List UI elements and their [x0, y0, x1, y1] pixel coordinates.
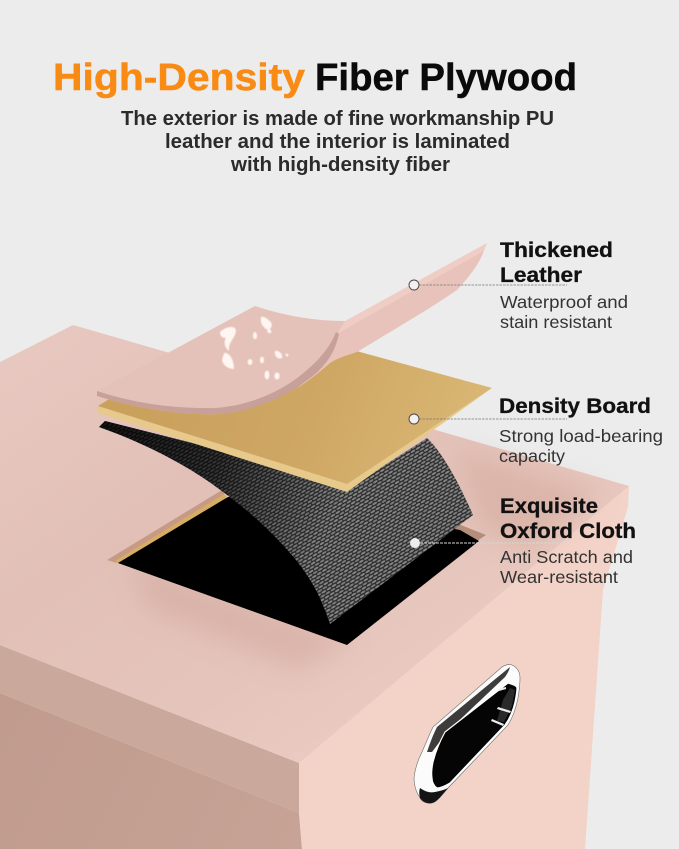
box right face	[299, 486, 629, 849]
dark top band	[427, 667, 510, 752]
callout: thickened leather	[409, 239, 628, 332]
chrome ring	[414, 665, 520, 803]
callout: thickened leather: Waterproof and	[500, 292, 628, 312]
density board layer	[98, 345, 492, 492]
board edge	[98, 388, 492, 492]
callout: oxford cloth: Anti Scratch and	[500, 547, 633, 567]
oxford cloth layer	[99, 421, 473, 624]
lid shading	[130, 450, 600, 670]
callout: oxford cloth: Exquisite	[500, 495, 598, 518]
strap highlight	[338, 243, 487, 333]
subtitle: with high-density fiber	[230, 154, 450, 176]
storage box	[0, 325, 629, 849]
callout: thickened leather: Thickened	[500, 239, 613, 262]
callout: thickened leather: stain resistant	[500, 312, 612, 332]
box front face	[0, 693, 302, 849]
title: Fiber Plywood	[315, 57, 577, 99]
bottom dark tip	[419, 788, 448, 803]
leather strap	[296, 250, 484, 389]
lid top face	[0, 325, 629, 763]
handle inner wall	[497, 688, 515, 722]
leather sheet	[97, 306, 345, 414]
handle inner highlights	[491, 687, 511, 726]
hole rim	[107, 490, 226, 563]
leather cut edge	[97, 332, 339, 414]
callout: density board: capacity	[499, 446, 565, 466]
thickened leather layer	[97, 243, 487, 414]
handle opening	[432, 683, 517, 788]
title: High-Density	[53, 57, 305, 99]
callout: density board	[409, 395, 663, 466]
water splash	[220, 317, 288, 380]
callout: density board: Density Board	[499, 395, 651, 418]
subtitle	[121, 108, 554, 176]
callout: density board: Strong load-bearing	[499, 426, 663, 446]
subtitle: The exterior is made of fine workmanship PU	[121, 108, 554, 130]
board top	[98, 345, 492, 484]
subtitle: leather and the interior is laminated	[165, 131, 510, 153]
handle	[414, 665, 520, 803]
lid side face	[0, 645, 299, 813]
title	[53, 57, 577, 99]
callout: oxford cloth	[410, 495, 636, 587]
callout: thickened leather: Leather	[500, 264, 582, 287]
hole interior	[118, 497, 479, 645]
callout: oxford cloth: Oxford Cloth	[500, 520, 636, 543]
callout: oxford cloth: Wear-resistant	[500, 567, 618, 587]
